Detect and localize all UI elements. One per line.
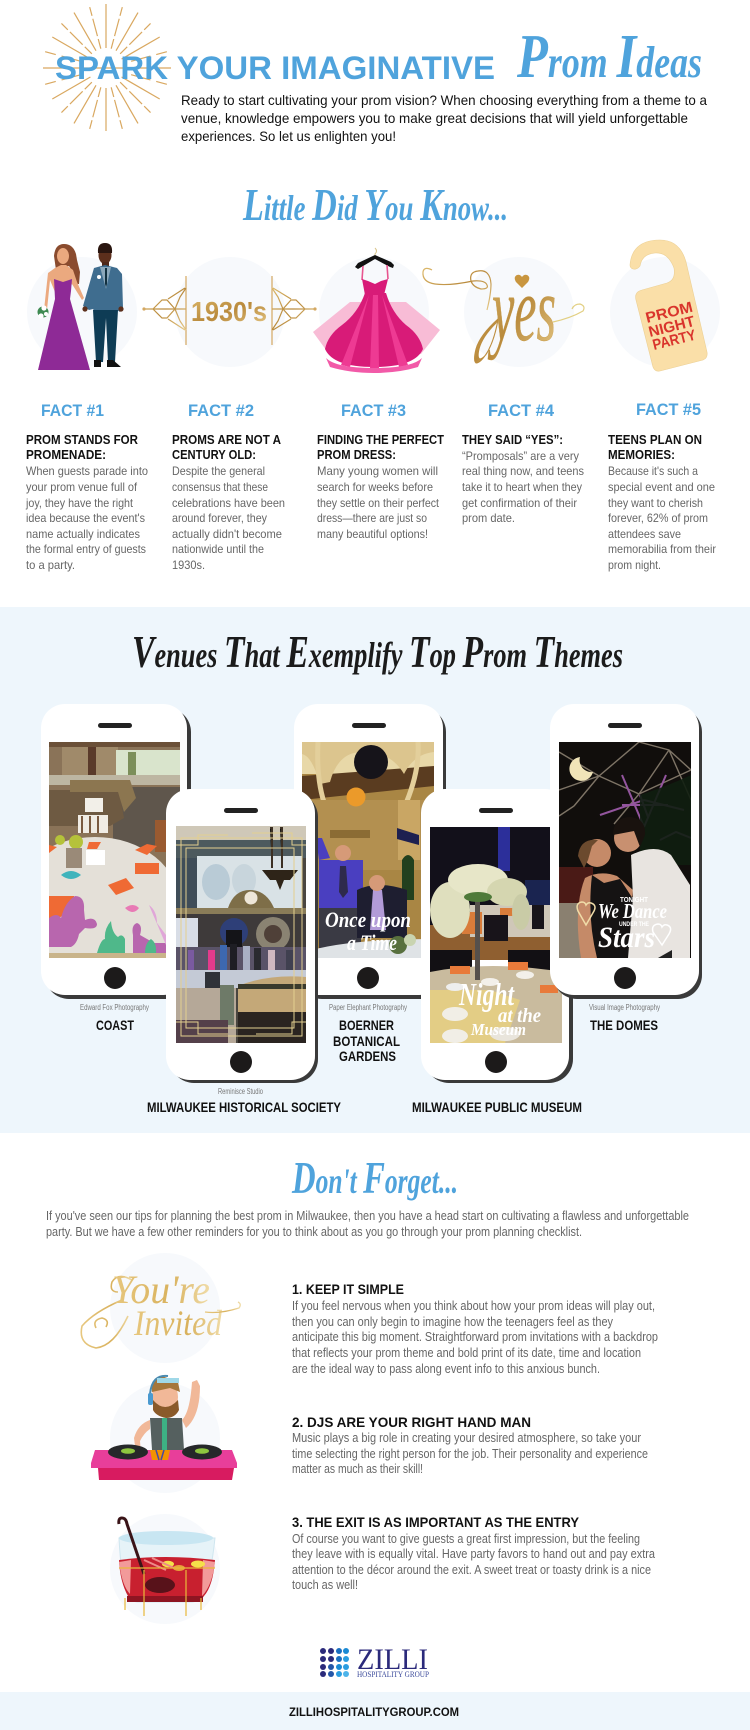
- label: tonight we dance under the stars: UNDER THE: [619, 922, 649, 928]
- panel: tip 2: Music plays a big role in creating your desired atmosphere, so take your: [292, 1430, 642, 1445]
- title: [55, 23, 702, 91]
- icon: 1930's art deco emblem: 1930's: [191, 296, 267, 327]
- panel: fact 2: FACT #2: [188, 401, 254, 420]
- panel: tip 1: If you feel nervous when you think about how your prom ideas will play out,: [292, 1298, 655, 1313]
- panel: fact 5: TEENS PLAN ON: [608, 433, 702, 447]
- panel: fact 1: joy, they have the right: [25, 496, 134, 510]
- captions: venue names: Visual Image Photography: [589, 1003, 660, 1012]
- title: script heading: Prom Ideas: [516, 23, 702, 91]
- footer band: [0, 1692, 750, 1730]
- panel: fact 1: [25, 401, 148, 572]
- panel: tip 1: anticipate this big moment. Straightforward prom invitations with a backdrop: [292, 1329, 658, 1344]
- panel: fact 4: real thing now, and teens: [462, 464, 584, 478]
- label: night at the museum: Night: [458, 976, 515, 1012]
- panel: fact 3: Many young women will: [317, 464, 438, 478]
- panel: fact 3: [317, 401, 444, 541]
- panel: fact 2: nationwide until the: [172, 542, 264, 556]
- heading: venues: Venues That Exemplify Top Prom Themes: [132, 626, 623, 677]
- captions: venue names: Reminisce Studio: [218, 1087, 263, 1096]
- photo: museum table setting: [430, 827, 562, 1043]
- captions: venue names: COAST: [96, 1017, 134, 1033]
- icon: gold yes lettering: [423, 257, 584, 367]
- photo: historical society hall: [176, 826, 306, 1043]
- captions: venue names: MILWAUKEE PUBLIC MUSEUM: [412, 1099, 582, 1115]
- panel: fact 1: PROMENADE:: [26, 448, 106, 462]
- panel: fact 2: around forever, they: [172, 511, 267, 525]
- icon: door hanger: PARTY: [651, 327, 698, 354]
- panel: tip 1: 1. KEEP IT SIMPLE: [292, 1281, 404, 1297]
- panel: fact 1: name actually indicates: [26, 527, 140, 541]
- intro text: [181, 92, 707, 144]
- panel: fact 1: to a party.: [26, 558, 75, 572]
- footer band: ZILLIHOSPITALITYGROUP.COM: [289, 1705, 459, 1719]
- panel: fact 5: FACT #5: [636, 400, 701, 419]
- intro text: venue, knowledge empowers you to make great decisions that will yield unforgettable: [181, 110, 688, 126]
- panel: fact 2: PROMS ARE NOT A: [172, 433, 281, 447]
- photo: boerner gardens dance: [302, 742, 434, 958]
- panel: fact 3: FACT #3: [341, 401, 406, 420]
- icon: door hanger: PROM: [644, 299, 695, 327]
- panel: fact 4: “Promposals” are a very: [462, 449, 579, 463]
- heading: Don't Forget: Don't Forget...: [291, 1152, 458, 1203]
- panel: fact 5: forever, 62% of prom: [608, 511, 708, 525]
- phone: Milwaukee Historical Society: [166, 789, 318, 1083]
- panel: tip 1: that reflects your prom theme and bold print of its date, time and location: [292, 1345, 641, 1360]
- panel: tip 1: [292, 1281, 658, 1376]
- panel: tip 3: touch as well!: [292, 1577, 358, 1592]
- icon: DJ at turntables: [91, 1376, 237, 1493]
- panel: fact 3: search for weeks before: [317, 480, 433, 494]
- captions: venue names: Edward Fox Photography: [80, 1003, 149, 1012]
- panel: fact 4: get confirmation of their: [462, 496, 577, 510]
- captions: venue names: Paper Elephant Photography: [329, 1003, 407, 1012]
- panel: fact 3: many beautiful options!: [317, 527, 428, 541]
- panel: tip 3: [292, 1514, 656, 1592]
- icon: prom couple: [27, 243, 137, 370]
- text: reminders intro: [46, 1208, 689, 1239]
- panel: tip 2: matter as much as their skill!: [292, 1461, 423, 1476]
- label: once upon a time: a Time: [347, 930, 397, 955]
- panel: fact 5: attendees save: [608, 527, 681, 541]
- panel: fact 4: THEY SAID “YES”:: [462, 433, 563, 447]
- panel: fact 3: they settle on their perfect: [317, 496, 440, 510]
- panel: fact 5: [608, 400, 716, 572]
- panel: tip 2: 2. DJS ARE YOUR RIGHT HAND MAN: [292, 1414, 531, 1430]
- heading: Little Did You Know: Little Did You Know...: [242, 179, 508, 230]
- panel: fact 2: 1930s.: [172, 558, 205, 572]
- panel: fact 4: take it to heart when they: [462, 480, 582, 494]
- panel: tip 2: time selecting the right person for the job. Their personality and experience: [292, 1446, 648, 1461]
- label: tonight we dance under the stars: TONIGHT: [620, 897, 649, 904]
- phone: Milwaukee Public Museum: [421, 789, 573, 1083]
- panel: fact 1: idea because the event's: [26, 511, 145, 525]
- panel: fact 5: they want to cherish: [608, 496, 703, 510]
- captions: venue names: GARDENS: [339, 1048, 396, 1064]
- panel: fact 1: When guests parade into: [26, 464, 148, 478]
- panel: fact 1: PROM STANDS FOR: [26, 433, 138, 447]
- panel: tip 1: are the ideal way to pass along event info to this anxious bunch.: [292, 1361, 600, 1376]
- captions: venue names: MILWAUKEE HISTORICAL SOCIETY: [147, 1099, 342, 1115]
- panel: fact 2: celebrations have been: [172, 496, 285, 510]
- panel: fact icons row: [27, 240, 720, 373]
- panel: fact 4: prom date.: [462, 511, 515, 525]
- icon: punch bowl: [110, 1514, 220, 1624]
- logo: Zilli Hospitality Group: ZILLI: [357, 1643, 428, 1676]
- panel: fact 2: Despite the general: [172, 464, 265, 478]
- panel: fact 3: dress—there are just so: [317, 511, 427, 525]
- panel: tip 1: then you can only begin to imagine how the teenagers feel as they: [292, 1314, 613, 1329]
- panel: fact 4: [462, 401, 584, 525]
- icon: door hanger: NIGHT: [647, 313, 697, 341]
- label: once upon a time: [326, 912, 410, 950]
- panel: fact 1: your prom venue full of: [26, 480, 138, 494]
- captions: venue names: BOERNER: [339, 1017, 394, 1033]
- icon: pink prom dress: [313, 248, 440, 373]
- panel: fact 2: actually didn't become: [172, 527, 282, 541]
- phone: Coast: [41, 704, 191, 999]
- panel: fact 3: PROM DRESS:: [317, 448, 396, 462]
- captions: venue names: BOTANICAL: [333, 1033, 400, 1049]
- panel: fact 4: FACT #4: [488, 401, 555, 420]
- logo: Zilli Hospitality Group: HOSPITALITY GROUP: [357, 1670, 429, 1679]
- panel: tip 3: 3. THE EXIT IS AS IMPORTANT AS THE ENTRY: [292, 1514, 580, 1530]
- label: night at the museum: Museum: [470, 1020, 526, 1039]
- panel: fact 3: FINDING THE PERFECT: [317, 433, 444, 447]
- icon: door hanger: [610, 240, 720, 371]
- icon: you're invited lettering: You're: [112, 1267, 210, 1312]
- panel: fact 5: prom night.: [608, 558, 661, 572]
- panel: tip 2: [292, 1414, 648, 1476]
- phone: Boerner Botanical Gardens: [294, 704, 446, 999]
- title: main heading: SPARK YOUR IMAGINATIVE: [55, 50, 495, 86]
- panel: fact 2: CENTURY OLD:: [172, 448, 256, 462]
- phone: The Domes: [550, 704, 702, 999]
- icon: gold yes lettering: yes: [488, 258, 556, 360]
- logo: Zilli Hospitality Group: [320, 1643, 429, 1679]
- label: night at the museum: at the: [498, 1005, 541, 1027]
- photo: coast dining room: [49, 742, 180, 958]
- panel: fact 1: the formal entry of guests: [26, 542, 146, 556]
- icon: you're invited lettering: Invited: [133, 1303, 223, 1343]
- icon: you're invited lettering: [81, 1253, 240, 1363]
- panel: fact 5: special event and one: [608, 480, 715, 494]
- label: tonight we dance under the stars: We Dance: [598, 899, 667, 923]
- text: reminders intro: party. But we have a few other reminders for you to think about as you go through your prom planning checklist.: [46, 1224, 582, 1239]
- panel: fact 1: FACT #1: [41, 401, 104, 420]
- panel: tip 3: they leave with is equally vital. Have party favors to hand out and pay extra: [292, 1546, 656, 1561]
- panel: tip 3: Of course you want to give guests a great first impression, but the feeling: [292, 1531, 640, 1546]
- icon: 1930's art deco emblem: [142, 257, 317, 367]
- panel: fact 5: memorabilia from their: [608, 542, 716, 556]
- captions: venue names: [80, 1003, 660, 1115]
- label: tonight we dance under the stars: [598, 897, 666, 948]
- panel: fact 2: [172, 401, 285, 572]
- panel: fact 5: MEMORIES:: [608, 448, 675, 462]
- label: once upon a time: Once upon: [325, 907, 411, 932]
- photo: domes couple: [559, 742, 691, 958]
- label: tonight we dance under the stars: Stars: [598, 921, 655, 954]
- panel: venues section: [0, 607, 750, 1133]
- intro text: experiences. So let us enlighten you!: [181, 128, 396, 144]
- captions: venue names: THE DOMES: [590, 1017, 658, 1033]
- panel: tip 3: attention to the décor around the exit. A sweet treat or toasty drink is a nice: [292, 1562, 651, 1577]
- label: night at the museum: [458, 983, 541, 1035]
- panel: fact 5: Because it's such a: [608, 464, 698, 478]
- intro text: Ready to start cultivating your prom vision? When choosing everything from a theme to a: [181, 92, 707, 108]
- icon: gold sunburst: [43, 4, 171, 131]
- panel: fact 2: consensus that these: [172, 480, 268, 494]
